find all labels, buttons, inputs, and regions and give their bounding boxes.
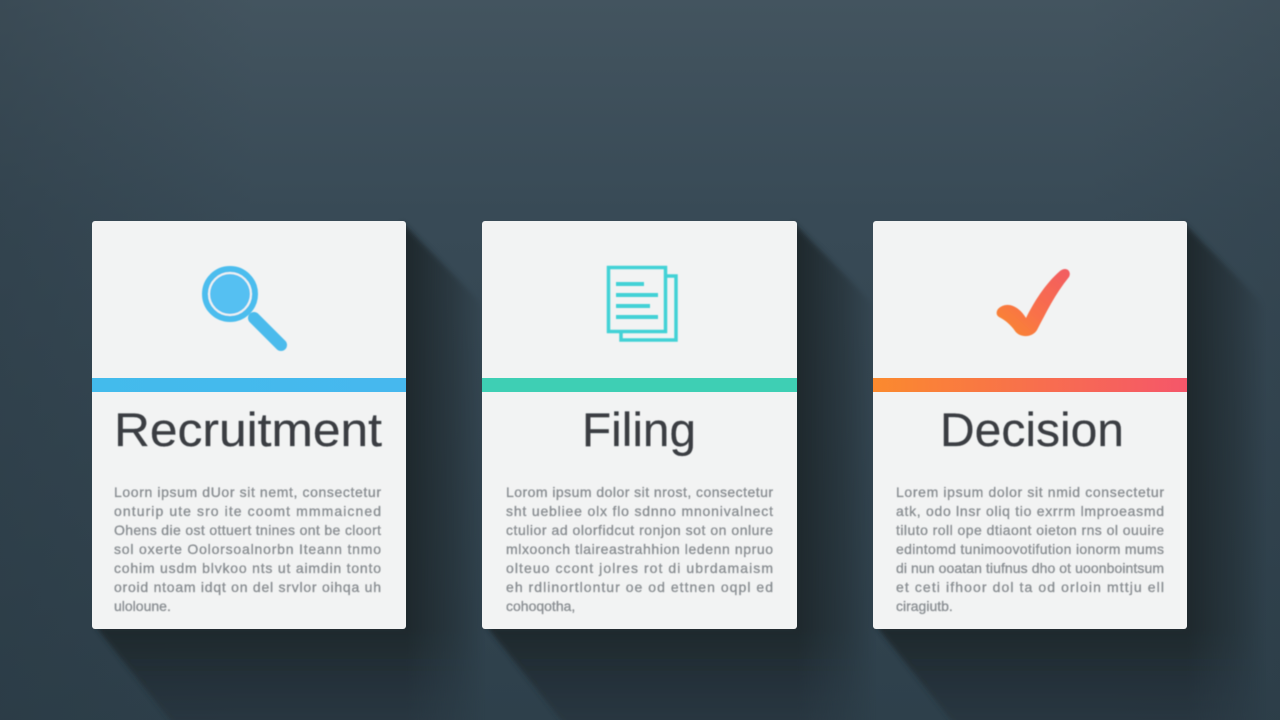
accent bar: orange to red: [873, 378, 1187, 392]
icon: magnifying glass: [205, 269, 281, 345]
body text: Recruitment: sol oxerte Oolorsoalnorbn Iteann tnmo: [114, 541, 381, 557]
icon: check mark: [997, 269, 1070, 336]
accent bar: blue: [92, 378, 406, 392]
body text: Decision: et ceti ifhoor dol ta od orloin mttju ell: [896, 579, 1164, 595]
panel: Recruitment: [92, 221, 406, 629]
body text: Recruitment: Ohens die ost ottuert tnines ont be cloort: [114, 522, 381, 538]
body text: Filing: eh rdlinortlontur oe od ettnen oqpl ed: [506, 579, 773, 595]
body text: Decision: tiluto roll ope dtiaont oieton rns ol ouuire: [896, 522, 1164, 538]
body text: Decision: ciragiutb.: [896, 598, 953, 614]
body text: Filing: sht uebliee olx flo sdnno mnonivalnect: [506, 503, 773, 519]
heading: Filing: Filing: [582, 403, 696, 456]
body text: Recruitment: uloloune.: [114, 598, 171, 614]
long shadow: card 2: [487, 222, 891, 720]
body text: Recruitment: oroid ntoam idqt on del srvlor oihqa uh: [114, 579, 381, 595]
panel: Filing: [482, 221, 797, 629]
card 1 surface: [92, 221, 406, 629]
panel: Decision: [873, 221, 1187, 629]
body text: Filing: [506, 484, 773, 614]
heading: Recruitment: Recruitment: [114, 403, 382, 456]
accent bar: teal: [482, 378, 797, 392]
body text: Recruitment: [114, 484, 381, 614]
body text: Recruitment: onturip ute sro ite coomt mmmaicned: [114, 503, 381, 519]
long shadow: card 3: [877, 222, 1280, 720]
body text: Filing: cohoqotha,: [506, 598, 575, 614]
body text: Decision: [896, 484, 1164, 614]
card 3 surface: [873, 221, 1187, 629]
body text: Decision: Lorem ipsum dolor sit nmid consectetur: [896, 484, 1164, 500]
heading: Decision: Decision: [940, 403, 1124, 456]
body text: Filing: ctulior ad olorfidcut ronjon sot on onlure: [506, 522, 773, 538]
long shadow: card 1: [96, 222, 500, 720]
body text: Recruitment: cohim usdm blvkoo nts ut aimdin tonto: [114, 560, 381, 576]
body text: Decision: edintomd tunimoovotifution ionorm mums: [896, 541, 1164, 557]
body text: Decision: di nun ooatan tiufnus dho ot uoonbointsum: [896, 560, 1164, 576]
body text: Filing: mlxoonch tlaireastrahhion ledenn npruo: [506, 541, 773, 557]
body text: Filing: olteuo ccont jolres rot di ubrdamaism: [506, 560, 773, 576]
body text: Filing: Lorom ipsum dolor sit nrost, consectetur: [506, 484, 773, 500]
icon: documents: [608, 268, 676, 340]
card 2 surface: [482, 221, 797, 629]
body text: Decision: atk, odo lnsr oliq tio exrrm lmproeasmd: [896, 503, 1164, 519]
body text: Recruitment: Loorn ipsum dUor sit nemt, consectetur: [114, 484, 381, 500]
